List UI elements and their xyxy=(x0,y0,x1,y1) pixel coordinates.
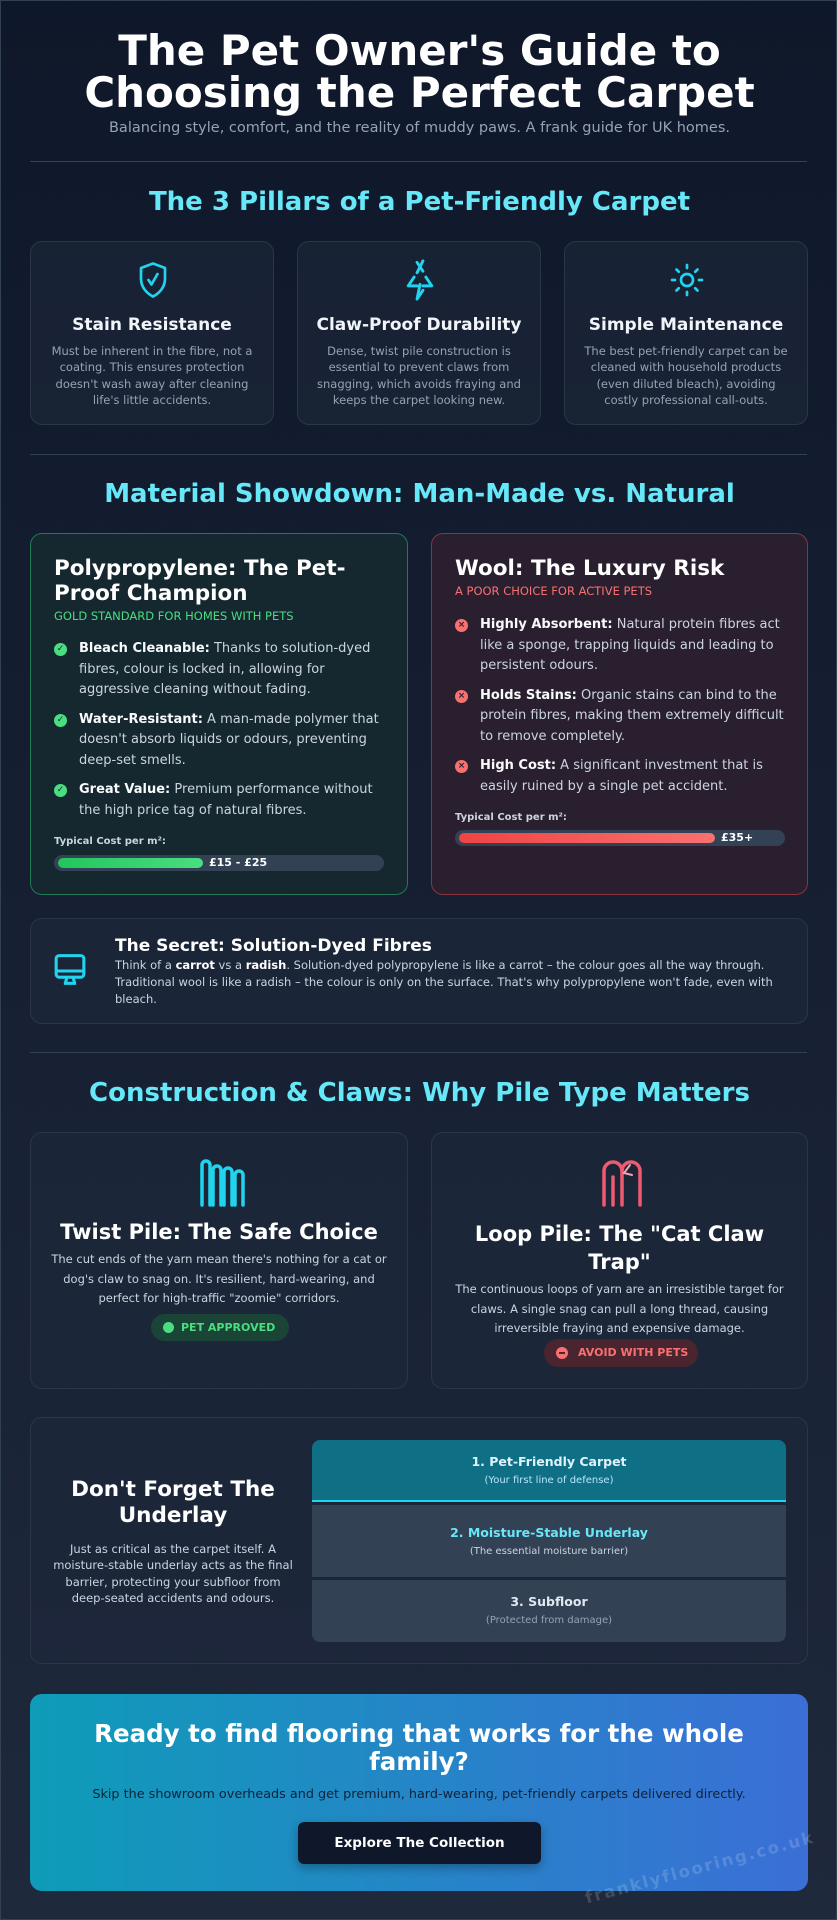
panel: twist pile xyxy=(30,1132,408,1389)
text: claw: Dense, twist pile construction is essential to prevent claws from snagging, which avoids fraying and keeps the carpet looking new. xyxy=(317,344,521,407)
heading: wool: Wool: The Luxury Risk xyxy=(455,556,724,581)
text: twist xyxy=(51,1220,387,1305)
icon: bolt xyxy=(406,259,434,300)
layer: subfloor: 3. Subfloor xyxy=(510,1594,588,1609)
text: twist: Twist Pile: The Safe Choice xyxy=(60,1220,378,1244)
panel: loop pile xyxy=(431,1132,808,1389)
text: secret: Think of a carrot vs a radish. Solution-dyed polypropylene is like a carrot – the colour goes all the way through. Traditional wool is like a radish – the colour is only on the surface. That's why polypropylene won't fade, even with bleach. xyxy=(115,958,773,1006)
badge: pet approved xyxy=(151,1314,289,1341)
layer: underlay: 2. Moisture-Stable Underlay xyxy=(450,1525,648,1540)
list: poly benefits: Water-Resistant: A man-made polymer that doesn't absorb liquids or odours, preventing deep-set smells. xyxy=(79,712,379,768)
heading: construction: Construction & Claws: Why Pile Type Matters xyxy=(89,1078,750,1108)
heading: poly: Polypropylene: The Pet-Proof Champion xyxy=(54,556,346,606)
list: wool drawbacks xyxy=(455,617,784,794)
icon: sun xyxy=(670,264,704,296)
watermark: franklyflooring.co.uk xyxy=(583,1828,817,1907)
text: underlay: Just as critical as the carpet itself. A moisture-stable underlay acts as the final barrier, protecting your subfloor from deep-seated accidents and odours. xyxy=(53,1542,293,1605)
layer: carpet: 1. Pet-Friendly Carpet xyxy=(471,1454,627,1469)
heading: material: Material Showdown: Man-Made vs. Natural xyxy=(104,479,735,509)
layer: underlay: (The essential moisture barrier) xyxy=(470,1546,628,1557)
list: wool drawbacks: Highly Absorbent: Natural protein fibres act like a sponge, trapping liquids and leading to persistent odours. xyxy=(480,617,780,673)
text: maintenance: Simple Maintenance xyxy=(589,315,783,335)
list: wool drawbacks: × xyxy=(458,761,465,771)
text: maintenance xyxy=(584,315,788,407)
panel: polypropylene xyxy=(30,533,408,895)
layer: subfloor: (Protected from damage) xyxy=(486,1615,612,1626)
list: wool drawbacks: High Cost: A significant investment that is easily ruined by a single pet accident. xyxy=(480,758,763,794)
text: underlay xyxy=(53,1477,293,1605)
text: maintenance: The best pet-friendly carpet can be cleaned with household products (even diluted bleach), avoiding costly professional call-outs. xyxy=(584,344,788,407)
list: poly benefits: ✓ xyxy=(57,714,64,724)
button xyxy=(298,1822,541,1864)
layer: carpet xyxy=(312,1440,786,1502)
text: stain: Stain Resistance xyxy=(72,315,232,335)
panel: polypropylene: GOLD STANDARD FOR HOMES WITH PETS xyxy=(54,609,294,623)
panel: polypropylene: Typical Cost per m²: xyxy=(54,836,166,847)
text: loop: Loop Pile: The "Cat Claw Trap" xyxy=(475,1222,764,1274)
diagram: layers xyxy=(312,1440,786,1642)
title: The Pet Owner's Guide to xyxy=(118,26,721,75)
text: claw xyxy=(316,315,522,407)
text: loop: The continuous loops of yarn are an irresistible target for claws. A single snag can pull a long thread, causing irreversible fraying and expensive damage. xyxy=(455,1282,784,1335)
icon: loop pile xyxy=(602,1160,642,1207)
list: poly benefits: Bleach Cleanable: Thanks to solution-dyed fibres, colour is locked in, allowing for aggressive cleaning without fading. xyxy=(79,641,370,697)
list: poly benefits: ✓ xyxy=(57,644,64,654)
text: stain: Must be inherent in the fibre, not a coating. This ensures protection doesn't wash away after cleaning life's little accidents. xyxy=(52,344,252,407)
badge: pet approved: PET APPROVED xyxy=(181,1321,275,1334)
bar: poly cost xyxy=(54,855,384,871)
button: Explore The Collection xyxy=(334,1835,505,1851)
layer: subfloor xyxy=(312,1580,786,1642)
layer: underlay xyxy=(312,1505,786,1577)
panel: stain resistance xyxy=(30,241,274,425)
text: secret xyxy=(114,936,773,1006)
heading: pillars: The 3 Pillars of a Pet-Friendly Carpet xyxy=(149,187,690,217)
list: poly benefits: Great Value: Premium performance without the high price tag of natural fibres. xyxy=(79,782,373,818)
panel: wool: Typical Cost per m²: xyxy=(455,812,567,823)
panel: underlay xyxy=(30,1417,808,1664)
panel: wool xyxy=(431,533,808,895)
title xyxy=(84,26,755,117)
cta: Ready to find flooring that works for the whole family? xyxy=(94,1719,744,1776)
callout: solution-dyed xyxy=(30,918,808,1024)
cta xyxy=(30,1694,808,1891)
list: poly benefits xyxy=(54,641,379,818)
text: stain xyxy=(52,315,252,407)
icon: shield xyxy=(140,262,166,298)
bar: wool cost xyxy=(455,830,785,846)
title: Choosing the Perfect Carpet xyxy=(84,68,755,117)
icon: twist pile xyxy=(200,1159,245,1207)
text: claw: Claw-Proof Durability xyxy=(316,315,521,335)
bar: wool cost: £35+ xyxy=(721,831,753,844)
list: poly benefits: ✓ xyxy=(57,785,64,795)
badge: avoid: AVOID WITH PETS xyxy=(578,1346,688,1359)
panel: maintenance xyxy=(564,241,808,425)
bar: poly cost: £15 - £25 xyxy=(209,856,267,869)
layer: carpet: (Your first line of defense) xyxy=(485,1475,613,1486)
text: underlay: Don't Forget The Underlay xyxy=(71,1477,275,1528)
panel: claw-proof xyxy=(297,241,541,425)
cta: Skip the showroom overheads and get premium, hard-wearing, pet-friendly carpets delivered directly. xyxy=(92,1787,746,1802)
list: wool drawbacks: × xyxy=(458,690,465,700)
text: loop xyxy=(455,1222,784,1335)
subtitle: Balancing style, comfort, and the reality of muddy paws. A frank guide for UK homes. xyxy=(109,120,730,136)
text: secret: The Secret: Solution-Dyed Fibres xyxy=(115,936,432,956)
badge: avoid xyxy=(544,1339,698,1367)
list: wool drawbacks: Holds Stains: Organic stains can bind to the protein fibres, making them extremely difficult to remove completely. xyxy=(480,688,784,744)
list: wool drawbacks: × xyxy=(458,620,465,630)
text: twist: The cut ends of the yarn mean there's nothing for a cat or dog's claw to snag on. It's resilient, hard-wearing, and perfect for high-traffic "zoomie" corridors. xyxy=(51,1252,387,1305)
icon: monitor xyxy=(54,954,86,985)
panel: wool: A POOR CHOICE FOR ACTIVE PETS xyxy=(455,584,652,598)
